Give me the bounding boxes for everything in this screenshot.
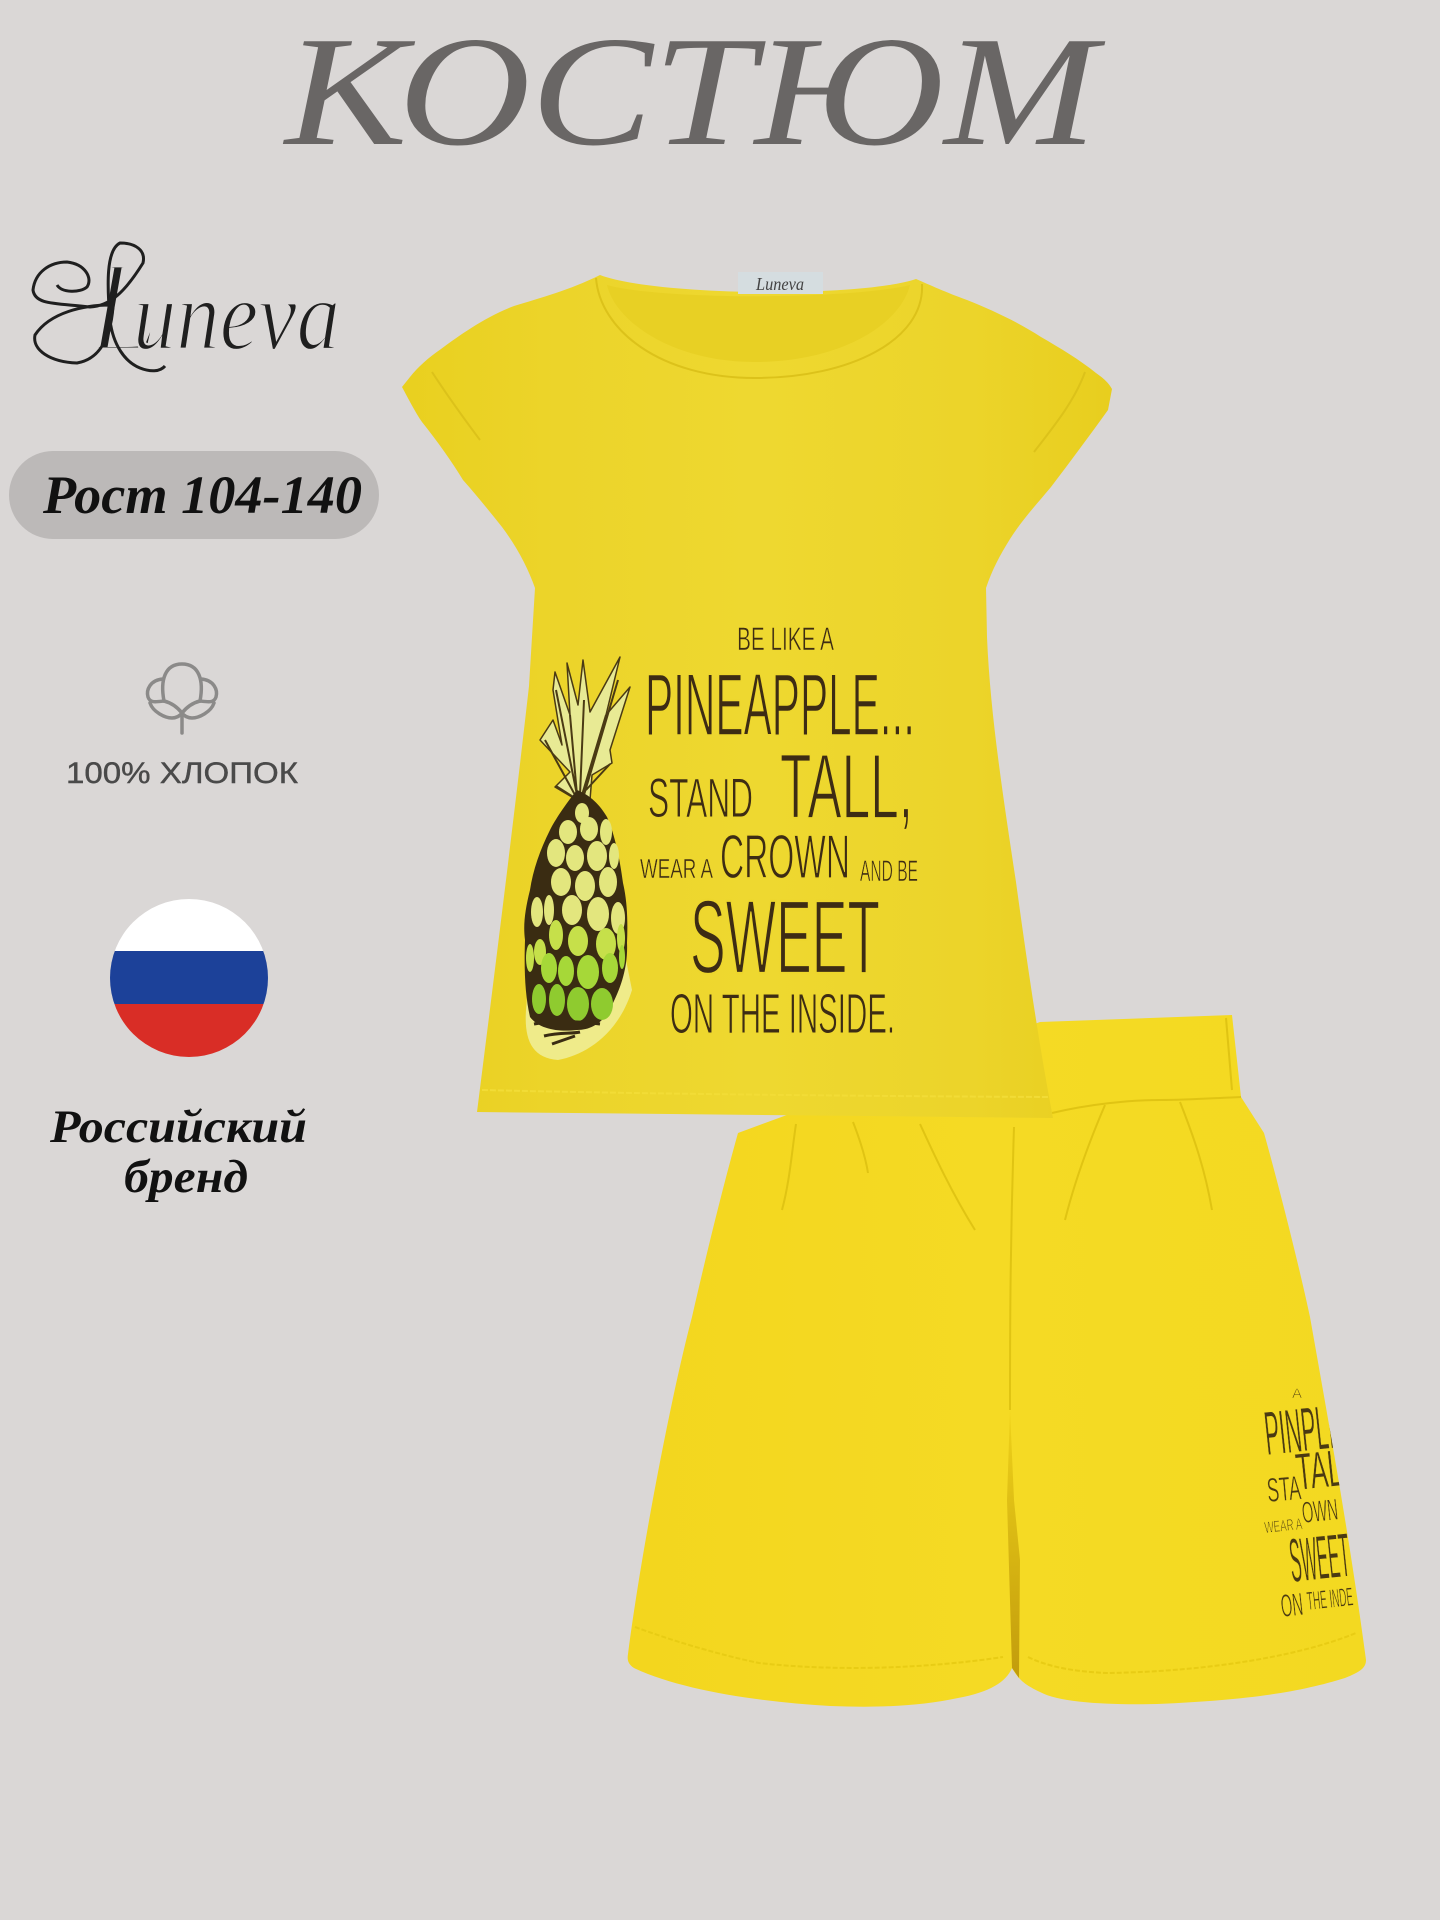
logo flourish bbox=[33, 243, 165, 371]
shorts print: ON bbox=[1279, 1586, 1305, 1624]
center seam shadow bbox=[1007, 1410, 1020, 1678]
shorts print: OWN bbox=[1300, 1493, 1340, 1530]
shirt slogan: BE LIKE A bbox=[737, 621, 834, 657]
shirt slogan: AND BE bbox=[860, 855, 918, 888]
shirt slogan: STAND bbox=[648, 766, 753, 829]
pineapple crown bbox=[540, 657, 630, 800]
pineapple graphic bbox=[524, 657, 632, 1060]
cotton label: 100% ХЛОПОК bbox=[66, 757, 299, 790]
pill shape bbox=[9, 451, 379, 539]
shirt slogan: TALL, bbox=[780, 736, 913, 838]
leg hems bbox=[635, 1627, 1356, 1673]
brand caption: бренд bbox=[124, 1151, 248, 1203]
infographic canvas: THE INDE bbox=[1305, 1581, 1354, 1616]
pineapple scales bbox=[531, 803, 625, 934]
waistband and pleats bbox=[782, 1018, 1241, 1410]
shirt slogan: CROWN bbox=[720, 823, 850, 892]
t-shirt bbox=[402, 272, 1112, 1118]
shirt slogan: ON THE INSIDE. bbox=[670, 982, 895, 1046]
shirt body bbox=[402, 275, 1112, 1118]
title: КОСТЮМ bbox=[283, 4, 1106, 178]
brand caption: Российский bbox=[49, 1101, 307, 1153]
logo wordmark: uneva bbox=[133, 260, 340, 371]
shirt slogan: SWEET bbox=[690, 879, 880, 996]
brand logo bbox=[33, 235, 340, 379]
shorts print: WEAR A bbox=[1264, 1516, 1303, 1537]
icon: cotton bbox=[148, 664, 216, 733]
shorts bbox=[628, 1015, 1366, 1707]
pineapple body bbox=[524, 790, 627, 1031]
shorts print: A bbox=[1292, 1385, 1303, 1401]
pineapple base scribble bbox=[534, 1022, 600, 1044]
height pill bbox=[9, 451, 379, 539]
pineapple crown veins bbox=[545, 680, 618, 800]
cotton badge bbox=[66, 664, 299, 790]
shorts body bbox=[628, 1015, 1366, 1707]
russian brand badge bbox=[49, 890, 307, 1203]
collar label: Luneva bbox=[755, 274, 804, 294]
shirt neck opening bbox=[607, 285, 910, 362]
logo wordmark: L bbox=[86, 235, 160, 379]
pineapple halo bbox=[526, 960, 632, 1060]
pill label: Рост 104-140 bbox=[42, 465, 362, 525]
shorts print: TAL bbox=[1293, 1439, 1345, 1502]
icon: russian flag bbox=[110, 899, 268, 1057]
shorts print bbox=[1261, 1385, 1354, 1624]
neck rib and cuffs bbox=[432, 278, 1085, 1097]
shirt slogan: WEAR A bbox=[640, 853, 713, 884]
t-shirt: PINEAPPLE... bbox=[645, 655, 915, 754]
collar label bbox=[738, 272, 823, 294]
shirt slogan bbox=[640, 621, 918, 1046]
shorts print: STA bbox=[1265, 1469, 1303, 1510]
